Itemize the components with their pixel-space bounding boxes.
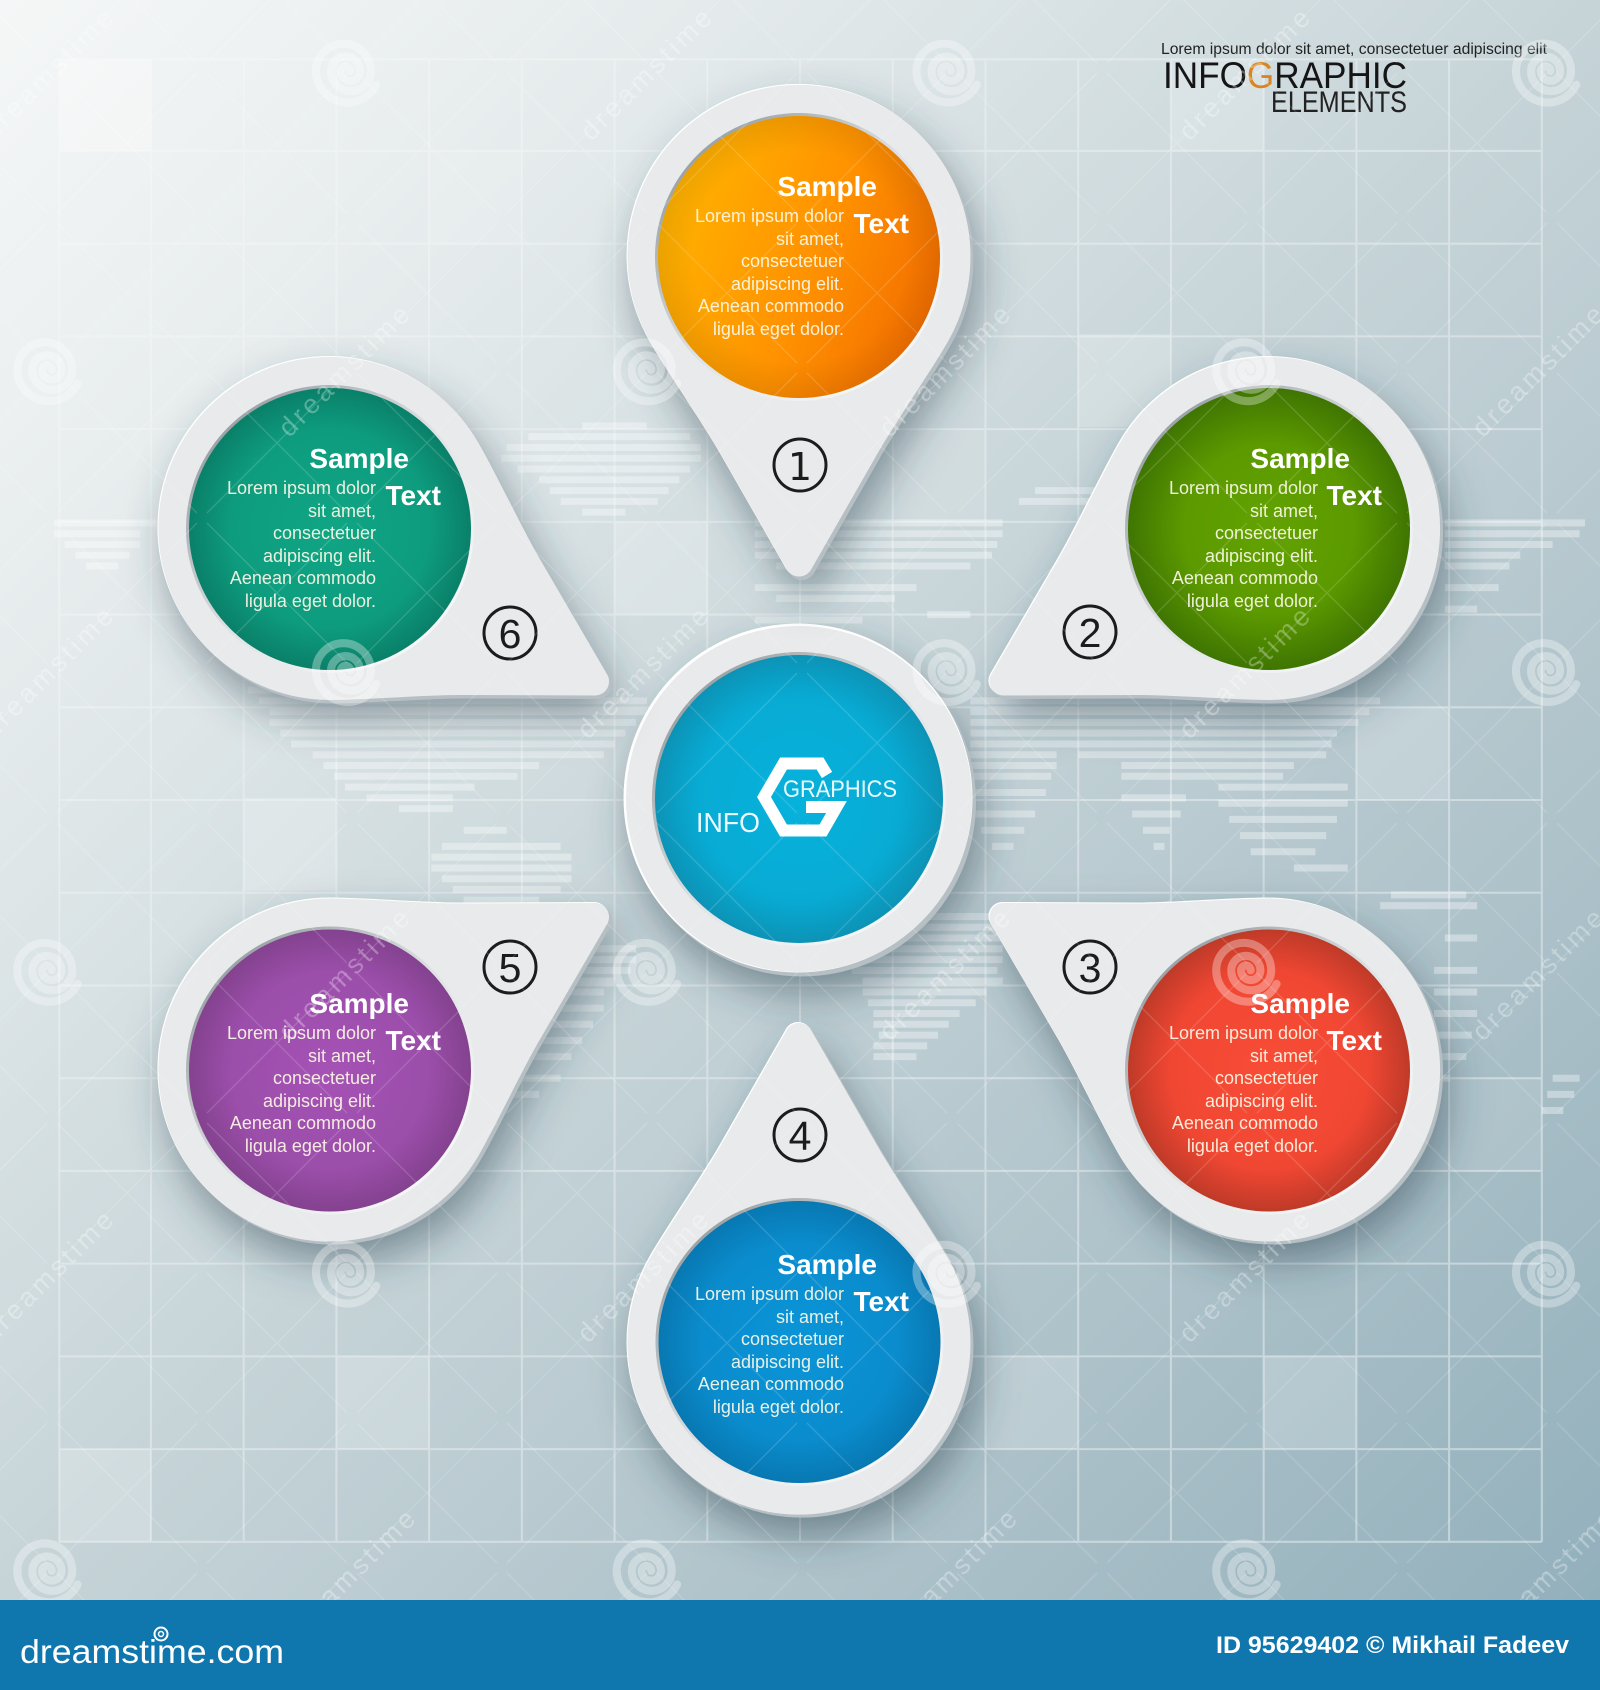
pin 5 colored disc xyxy=(189,930,471,1212)
pin 4 text: Lorem ipsum dolor xyxy=(695,1284,844,1304)
pin 6 text: Text xyxy=(386,480,441,511)
pin 4 text: sit amet, xyxy=(776,1307,844,1327)
pin 2 text: ligula eget dolor. xyxy=(1187,591,1318,611)
watermark overlay: dreamstime xyxy=(571,1205,714,1348)
pin 5 text: ligula eget dolor. xyxy=(245,1136,376,1156)
pin 3 text: sit amet, xyxy=(1250,1046,1318,1066)
pin 5 text: Sample xyxy=(309,988,409,1019)
pin 6 text: sit amet, xyxy=(308,501,376,521)
pin 4 text: Text xyxy=(854,1286,909,1317)
title block: INFOGRAPHIC xyxy=(1163,55,1407,96)
pin 1 number xyxy=(774,439,826,491)
pin 1 number: 1 xyxy=(788,445,812,489)
title block xyxy=(1161,41,1548,119)
pin 4 number xyxy=(774,1109,826,1161)
pin 2 text xyxy=(1169,443,1382,611)
pin 6 text: Lorem ipsum dolor xyxy=(227,478,376,498)
panel: central circle xyxy=(624,624,982,994)
pin 3 text: ligula eget dolor. xyxy=(1187,1136,1318,1156)
watermark overlay: dreamstime xyxy=(272,299,416,443)
pin 5 number: 5 xyxy=(499,945,521,991)
pin 4 text: consectetuer xyxy=(741,1329,844,1349)
world map made of stripes xyxy=(54,426,1585,1111)
pin 6 number: 6 xyxy=(499,611,521,657)
pin 1 text: consectetuer xyxy=(741,251,844,271)
pin 2 number: 2 xyxy=(1079,610,1101,656)
pin 1 text xyxy=(695,171,909,339)
pin 4 text: ligula eget dolor. xyxy=(713,1397,844,1417)
pin 6 text: consectetuer xyxy=(273,523,376,543)
footer banner xyxy=(0,1600,1600,1690)
pin 6 text: ligula eget dolor. xyxy=(245,591,376,611)
pin 2 colored disc xyxy=(1128,388,1410,670)
pin 5 text: sit amet, xyxy=(308,1046,376,1066)
pin 6 number xyxy=(484,607,536,659)
panel: pin 3 red xyxy=(905,760,1511,1324)
center logo: INFO xyxy=(696,807,760,838)
pin 3 text: consectetuer xyxy=(1215,1068,1318,1088)
panel: pin 4 blue xyxy=(626,1022,978,1535)
watermark overlay: dreamstime xyxy=(879,1504,1023,1647)
pin 2 text: Text xyxy=(1326,480,1382,511)
pin 2 text: Sample xyxy=(1250,443,1350,474)
pin 3 text: adipiscing elit. xyxy=(1205,1091,1318,1111)
panel: pin 5 purple xyxy=(95,760,701,1324)
pin 6 text: Sample xyxy=(309,443,409,474)
pin 3 number: 3 xyxy=(1079,945,1101,991)
pin 1 text: sit amet, xyxy=(776,229,844,249)
watermark overlay: dreamstime xyxy=(278,1504,421,1647)
title block: Lorem ipsum dolor sit amet, consectetuer adipiscing elit xyxy=(1161,41,1548,58)
center logo: GRAPHICS xyxy=(783,776,897,803)
center logo xyxy=(696,764,897,838)
watermark overlay: dreamstime xyxy=(1173,3,1316,146)
pin 1 text: Sample xyxy=(777,171,877,202)
pin 1 text: Aenean commodo xyxy=(698,296,844,316)
pin 4 number: 4 xyxy=(789,1113,811,1159)
pin 4 colored disc xyxy=(658,1201,940,1483)
pin 6 text: Aenean commodo xyxy=(230,568,376,588)
pin 5 text: Lorem ipsum dolor xyxy=(227,1023,376,1043)
pin 5 text: Text xyxy=(386,1025,441,1056)
watermark overlay: dreamstime xyxy=(1173,1205,1316,1348)
pin 3 text: Lorem ipsum dolor xyxy=(1169,1023,1318,1043)
pin 2 text: sit amet, xyxy=(1250,501,1318,521)
pin 5 text xyxy=(227,988,441,1156)
title block: ELEMENTS xyxy=(1271,86,1407,119)
pin 5 text: adipiscing elit. xyxy=(263,1091,376,1111)
pin 1 text: Lorem ipsum dolor xyxy=(695,206,844,226)
pin 6 colored disc xyxy=(189,388,471,670)
footer logo: dreamstime.com xyxy=(20,1633,284,1670)
pin 1 text: Text xyxy=(854,208,909,239)
watermark overlay: dreamstime xyxy=(571,601,714,745)
panel: pin 2 green xyxy=(905,293,1511,858)
pin 4 text: Sample xyxy=(777,1249,877,1280)
footer credit: ID 95629402 © Mikhail Fadeev xyxy=(1216,1632,1570,1659)
pin 3 text: Text xyxy=(1326,1025,1382,1056)
panel: pin 1 orange xyxy=(626,84,978,597)
watermark overlay: dreamstime xyxy=(1173,601,1316,745)
pin 4 text: adipiscing elit. xyxy=(731,1352,844,1372)
pin 5 text: Aenean commodo xyxy=(230,1113,376,1133)
pin 3 colored disc xyxy=(1128,930,1410,1212)
pin 2 text: Lorem ipsum dolor xyxy=(1169,478,1318,498)
pin 1 text: adipiscing elit. xyxy=(731,274,844,294)
pin 3 text: Aenean commodo xyxy=(1172,1113,1318,1133)
pin 2 text: consectetuer xyxy=(1215,523,1318,543)
pin 6 text: adipiscing elit. xyxy=(263,546,376,566)
pin 6 text xyxy=(227,443,441,611)
panel: pin 6 teal xyxy=(95,293,701,858)
watermark overlay: dreamstime xyxy=(873,903,1016,1046)
pin 1 colored disc xyxy=(658,116,940,398)
watermark overlay: dreamstime xyxy=(574,3,718,146)
pin 3 text: Sample xyxy=(1250,988,1350,1019)
pin 4 text xyxy=(695,1249,909,1417)
pin 5 text: consectetuer xyxy=(273,1068,376,1088)
watermark overlay: dreamstime xyxy=(272,903,416,1046)
pin 2 number xyxy=(1064,606,1116,658)
center colored disc xyxy=(655,655,943,943)
pin 3 number xyxy=(1064,941,1116,993)
pin 5 number xyxy=(484,941,536,993)
pin 1 text: ligula eget dolor. xyxy=(713,319,844,339)
pin 3 text xyxy=(1169,988,1382,1156)
pin 4 text: Aenean commodo xyxy=(698,1374,844,1394)
pin 2 text: Aenean commodo xyxy=(1172,568,1318,588)
pin 2 text: adipiscing elit. xyxy=(1205,546,1318,566)
watermark overlay: dreamstime xyxy=(873,299,1016,443)
